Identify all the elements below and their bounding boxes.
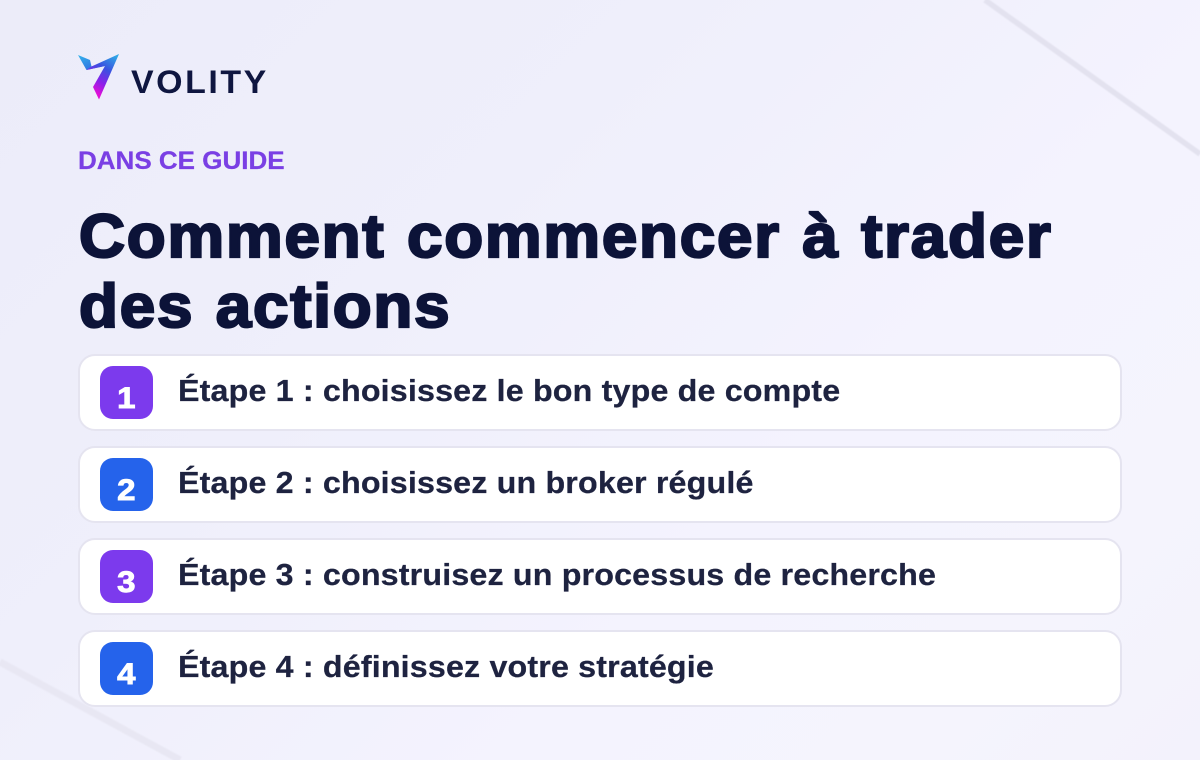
step 1 text: Étape 1 : choisissez le bon type de compte — [178, 373, 840, 408]
badge: number 2 — [100, 458, 153, 511]
wordmark: VOLITY — [131, 64, 269, 100]
badge: number 2: 2 — [117, 474, 136, 507]
title — [79, 202, 1053, 340]
eyebrow label: DANS CE GUIDE — [78, 147, 285, 175]
badge: number 4 — [100, 642, 153, 695]
badge: number 4: 4 — [117, 658, 136, 691]
badge: number 3: 3 — [117, 566, 136, 599]
step 2 text: Étape 2 : choisissez un broker régulé — [178, 465, 754, 500]
step 3 text: Étape 3 : construisez un processus de recherche — [178, 557, 936, 592]
panel: step 1 — [78, 354, 1122, 431]
logo — [78, 54, 269, 100]
badge: number 1: 1 — [117, 382, 136, 415]
badge: number 3 — [100, 550, 153, 603]
panel: step 3 — [78, 538, 1122, 615]
panel: step 4 — [78, 630, 1122, 707]
icon: Volity mark — [78, 54, 119, 100]
badge: number 1 — [100, 366, 153, 419]
panel: step 2 — [78, 446, 1122, 523]
title: des actions — [79, 272, 451, 340]
title: Comment commencer à trader — [79, 202, 1053, 270]
step 4 text: Étape 4 : définissez votre stratégie — [178, 649, 714, 684]
